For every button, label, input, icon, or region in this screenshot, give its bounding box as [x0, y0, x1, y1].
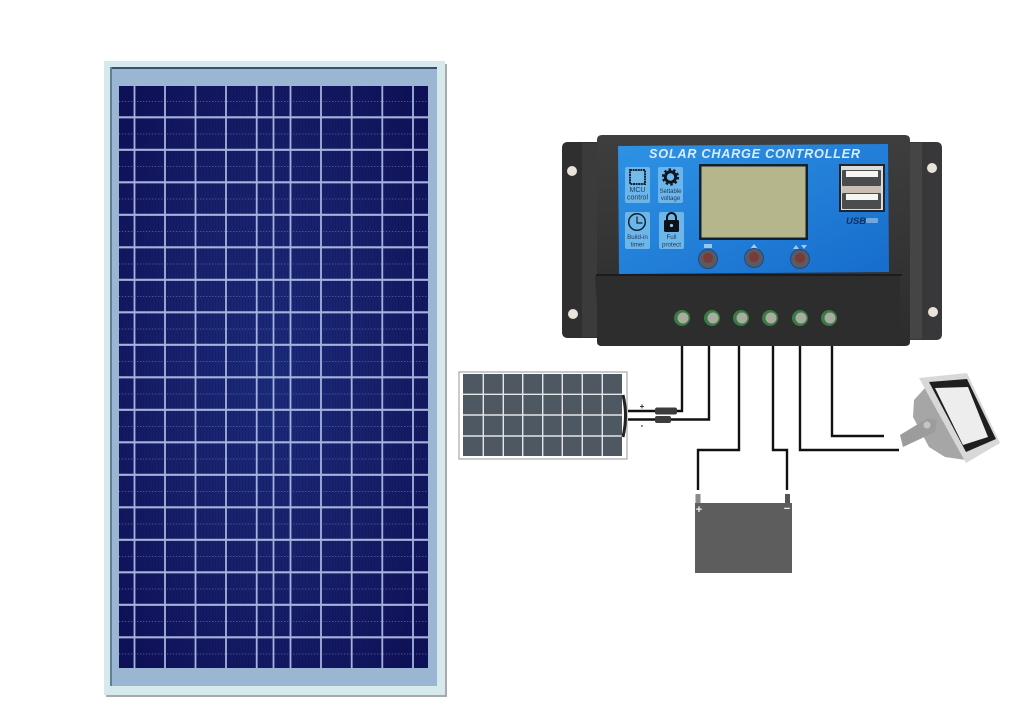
polarity labels: +: [640, 402, 645, 411]
feature tile: Full protect: [659, 212, 684, 249]
feature tile: Full protect: Full: [667, 234, 676, 241]
button: menu: [698, 244, 718, 268]
battery: −: [784, 503, 790, 515]
feature tile: Settable voltage: [658, 167, 683, 203]
right mounting ear: [908, 142, 942, 340]
USB ports: [839, 164, 885, 227]
button: up: [744, 244, 764, 268]
blue faceplate: [618, 144, 889, 274]
button: up/down: [790, 245, 810, 268]
feature tile: MCU control: [625, 167, 650, 203]
LCD screen: [699, 164, 808, 240]
icon: floodlight: [900, 373, 1000, 463]
feature tile: Build-in timer: [625, 212, 650, 249]
controller: solar charge controller: [562, 135, 942, 346]
battery: [695, 494, 792, 573]
terminal screws: [674, 310, 837, 326]
feature tile: Settable voltage: Settable: [659, 189, 682, 195]
panel: large solar panel: [104, 61, 447, 697]
connectors: MC4 plugs: -: [641, 421, 644, 430]
feature tile: Settable voltage: voltage: [661, 196, 681, 202]
feature tile: Full protect: protect: [662, 242, 681, 248]
faceplate title: SOLAR CHARGE CONTROLLER: [649, 147, 861, 161]
feature tile: MCU control: control: [627, 194, 648, 202]
feature tile: MCU control: MCU: [630, 187, 645, 194]
controller body: [597, 135, 910, 346]
connectors: MC4 plugs: [640, 402, 677, 430]
left mounting ear: [562, 142, 598, 338]
wires: controller to devices: [628, 346, 899, 490]
panel: small flexible solar panel: [459, 372, 627, 459]
feature tile: Build-in timer: Build-in: [627, 234, 648, 241]
USB ports: USB: [846, 216, 866, 227]
battery: +: [696, 504, 702, 516]
feature tile: Build-in timer: timer: [631, 242, 644, 248]
